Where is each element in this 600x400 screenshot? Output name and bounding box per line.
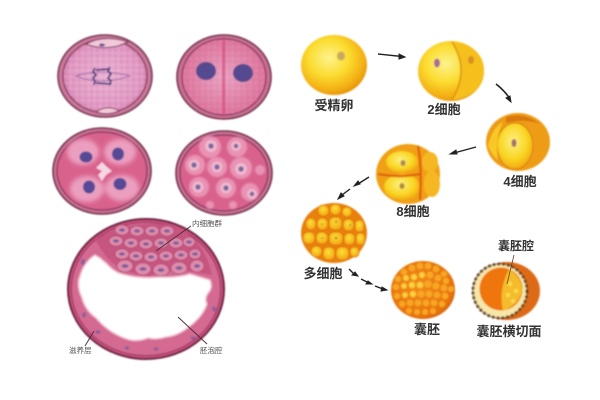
label: fertilized egg: 受精卵 (314, 98, 354, 113)
inner cell mass (95, 224, 212, 276)
label: blastocoel: 胚泡腔 (200, 345, 223, 355)
label: multicellular: 多细胞 (303, 266, 343, 281)
cell: four-cell stage (486, 113, 550, 171)
cell: zygote at spindle stage (58, 35, 152, 117)
leader line: blastocoel of blastula (507, 255, 514, 284)
cell: four-cell stage (53, 128, 151, 214)
panel: cleavage sequence (301, 35, 550, 320)
cell: two-cell stage (418, 41, 484, 101)
label: trophoblast: 滋养层 (69, 345, 92, 355)
cell: blastula (391, 261, 455, 319)
leader line: blastocoel (178, 317, 207, 344)
label: blastula: 囊胚 (414, 322, 440, 337)
arrow: multicellular to blastula (349, 269, 387, 291)
arrow: 4-cell to 8-cell (450, 147, 476, 154)
cell: multicellular stage (301, 203, 367, 263)
arrow: 2-cell to 4-cell (496, 84, 511, 102)
label: 2-cell: 2细胞 (427, 102, 461, 117)
trophoblast cell nuclei (81, 259, 216, 351)
cell: blastula cross-section (473, 262, 540, 320)
blastocoel cavity (78, 255, 211, 340)
arrow: 8-cell to multicellular (338, 177, 369, 199)
label: 4-cell: 4细胞 (503, 174, 537, 189)
leader line: inner cell mass (156, 226, 191, 251)
label: blastula cross-section: 囊胚横切面 (476, 324, 542, 339)
panel: human embryo histology (53, 35, 272, 359)
cell: two-cell stage (177, 35, 271, 119)
arrow: zygote to 2-cell (378, 54, 405, 59)
cell: fertilized egg (301, 35, 367, 95)
cell: morula stage (176, 131, 272, 215)
label: blastocoel of blastula: 囊胚腔 (498, 238, 534, 253)
label: 8-cell: 8细胞 (396, 204, 430, 219)
label: inner cell mass: 内细胞群 (192, 218, 222, 228)
leader line: trophoblast (85, 331, 94, 346)
cell: eight-cell stage (376, 144, 440, 204)
blastocyst cross-section (68, 219, 224, 359)
